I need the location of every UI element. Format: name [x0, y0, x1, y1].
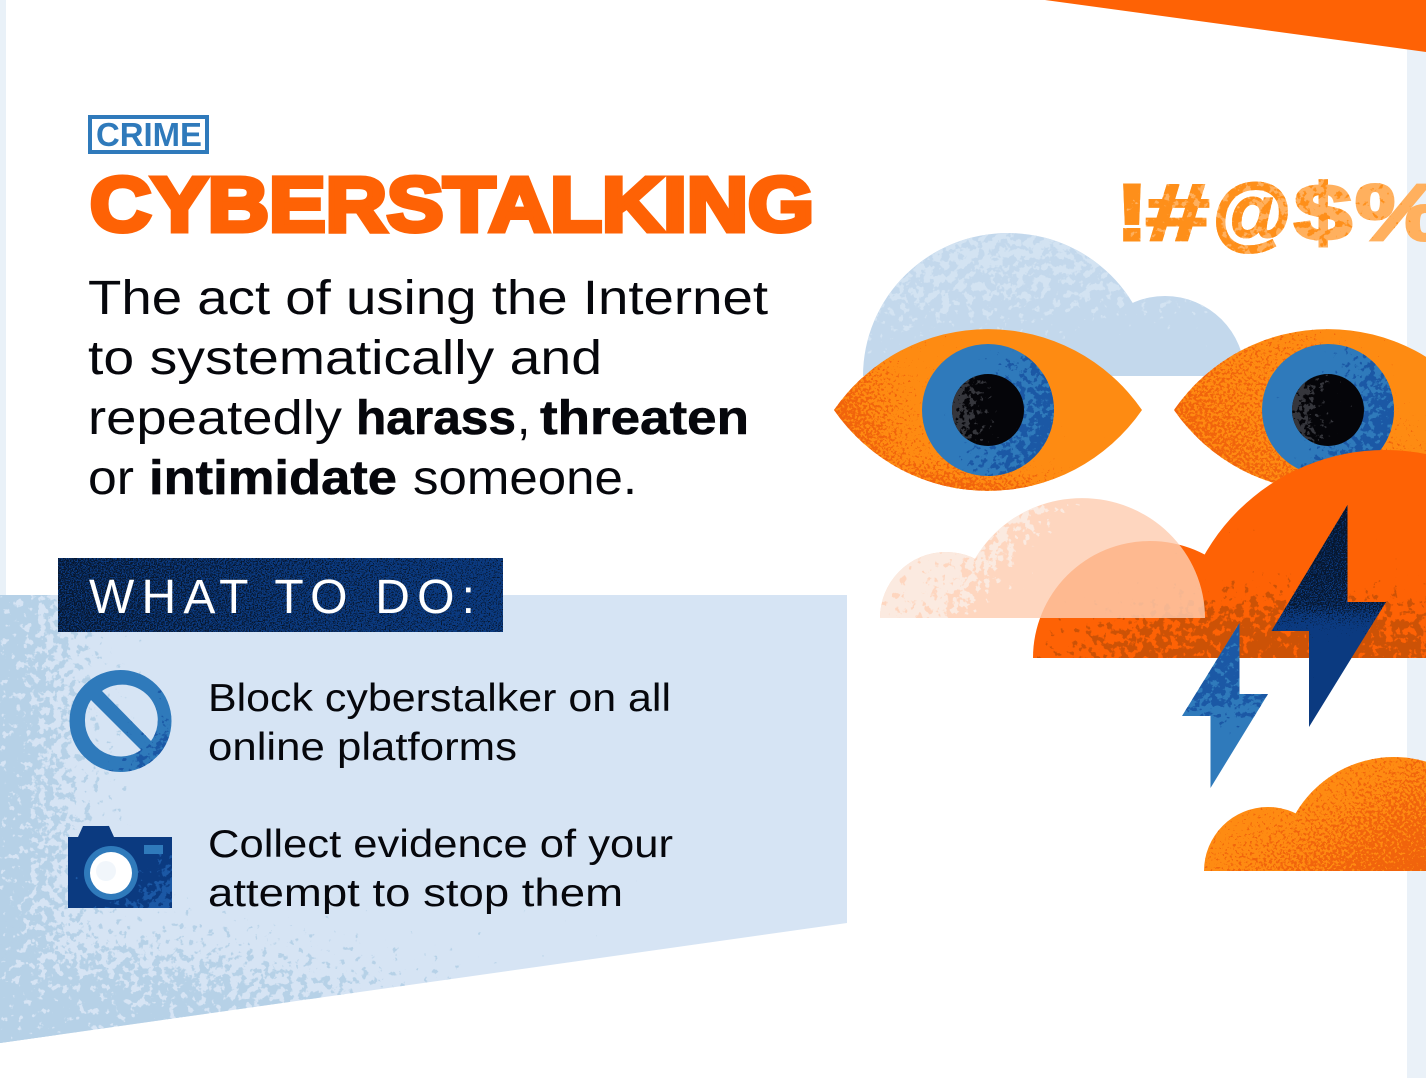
step 1 text: online platforms	[208, 726, 517, 769]
symbols: grawlix: %	[1355, 168, 1426, 257]
symbols: grawlix: @	[1213, 168, 1291, 257]
lightning bolt: large	[1271, 505, 1386, 727]
cloud: lower orange	[1204, 757, 1426, 871]
title: CYBERSTALKING	[90, 162, 814, 248]
top corner orange wedge	[1045, 0, 1426, 52]
step 2 text	[208, 823, 673, 915]
heading: what to do	[58, 558, 503, 632]
right edge strip	[1407, 48, 1426, 1078]
icon: camera	[68, 826, 172, 908]
definition text block: ,	[517, 392, 530, 445]
definition text block: or	[88, 452, 134, 505]
cloud: translucent peach	[880, 498, 1205, 618]
left edge strip	[0, 0, 6, 596]
step 2 text: attempt to stop them	[208, 872, 623, 915]
step 2 text: Collect evidence of your	[208, 823, 673, 866]
panel: what to do background	[0, 595, 847, 1045]
symbols: grawlix: #	[1146, 168, 1209, 257]
definition text block: intimidate	[149, 452, 397, 505]
definition text block: to systematically and	[88, 332, 602, 385]
icon: block sign	[69, 670, 172, 773]
cloud: pale blue	[863, 233, 1245, 376]
lightning bolt: small	[1182, 623, 1268, 788]
definition text block	[88, 272, 768, 505]
cloud: orange storm	[1033, 450, 1426, 658]
definition text block: someone.	[413, 452, 637, 505]
step 1 text: Block cyberstalker on all	[208, 677, 671, 720]
symbols: grawlix: $	[1294, 168, 1352, 257]
symbols: grawlix: !	[1116, 168, 1148, 257]
eye: left	[834, 329, 1142, 491]
definition text block: repeatedly	[88, 392, 342, 445]
eye: right	[1174, 329, 1426, 491]
definition text block: threaten	[540, 392, 749, 445]
category tag: crime: CRIME	[96, 116, 202, 153]
symbols: grawlix	[1123, 179, 1426, 254]
definition text block: The act of using the Internet	[88, 272, 768, 325]
heading: what to do: WHAT TO DO:	[89, 571, 475, 624]
step 1 text	[208, 677, 671, 769]
definition text block: harass	[356, 392, 516, 445]
